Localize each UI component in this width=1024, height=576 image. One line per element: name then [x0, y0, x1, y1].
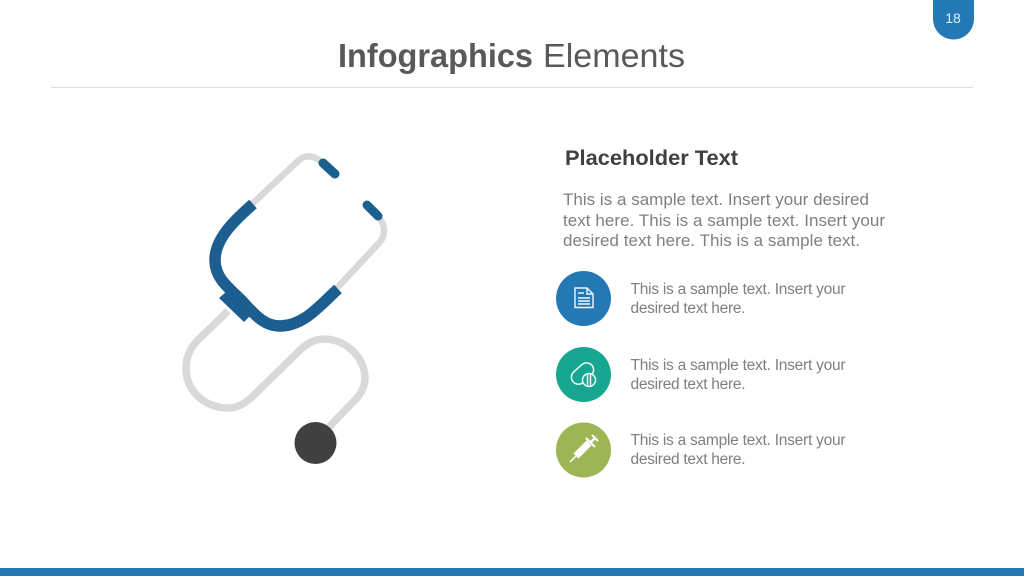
- item 3 text: desired text here.: [630, 451, 746, 468]
- item 1 text: desired text here.: [630, 300, 746, 317]
- intro paragraph: [563, 190, 885, 250]
- chest piece: [294, 422, 336, 464]
- item 1 text: [630, 281, 846, 317]
- footer bar: [0, 568, 1024, 576]
- placeholder heading: Placeholder Text: [565, 146, 738, 170]
- intro paragraph: desired text here. This is a sample text.: [563, 231, 860, 250]
- item 1 text: This is a sample text. Insert your: [630, 281, 846, 298]
- item 3 text: This is a sample text. Insert your: [630, 432, 846, 449]
- right ear tube: [337, 214, 384, 288]
- icon: pills: [556, 347, 611, 402]
- intro paragraph: This is a sample text. Insert your desired: [563, 190, 869, 209]
- list item 2: [556, 347, 846, 402]
- left ear tip: [323, 163, 335, 174]
- title: Elements: [543, 38, 685, 75]
- item 2 text: This is a sample text. Insert your: [630, 357, 846, 374]
- intro paragraph: text here. This is a sample text. Insert your: [563, 211, 885, 230]
- icon: document: [556, 271, 611, 326]
- left ear tube: [252, 156, 325, 204]
- item 2 text: [630, 357, 846, 393]
- yoke block: [219, 292, 254, 322]
- lower tube: [186, 311, 365, 428]
- item 3 text: [630, 432, 846, 468]
- title: [338, 38, 685, 75]
- stethoscope illustration: [186, 156, 384, 464]
- icon: syringe: [556, 422, 611, 478]
- page number tab: 18: [945, 10, 961, 26]
- blue headset tube: [215, 204, 338, 326]
- item 2 text: desired text here.: [630, 376, 746, 393]
- list item 1: [556, 271, 846, 326]
- page number tab: [933, 0, 974, 40]
- right ear tip: [367, 205, 378, 216]
- list item 3: [556, 422, 846, 478]
- title: Infographics: [338, 38, 533, 75]
